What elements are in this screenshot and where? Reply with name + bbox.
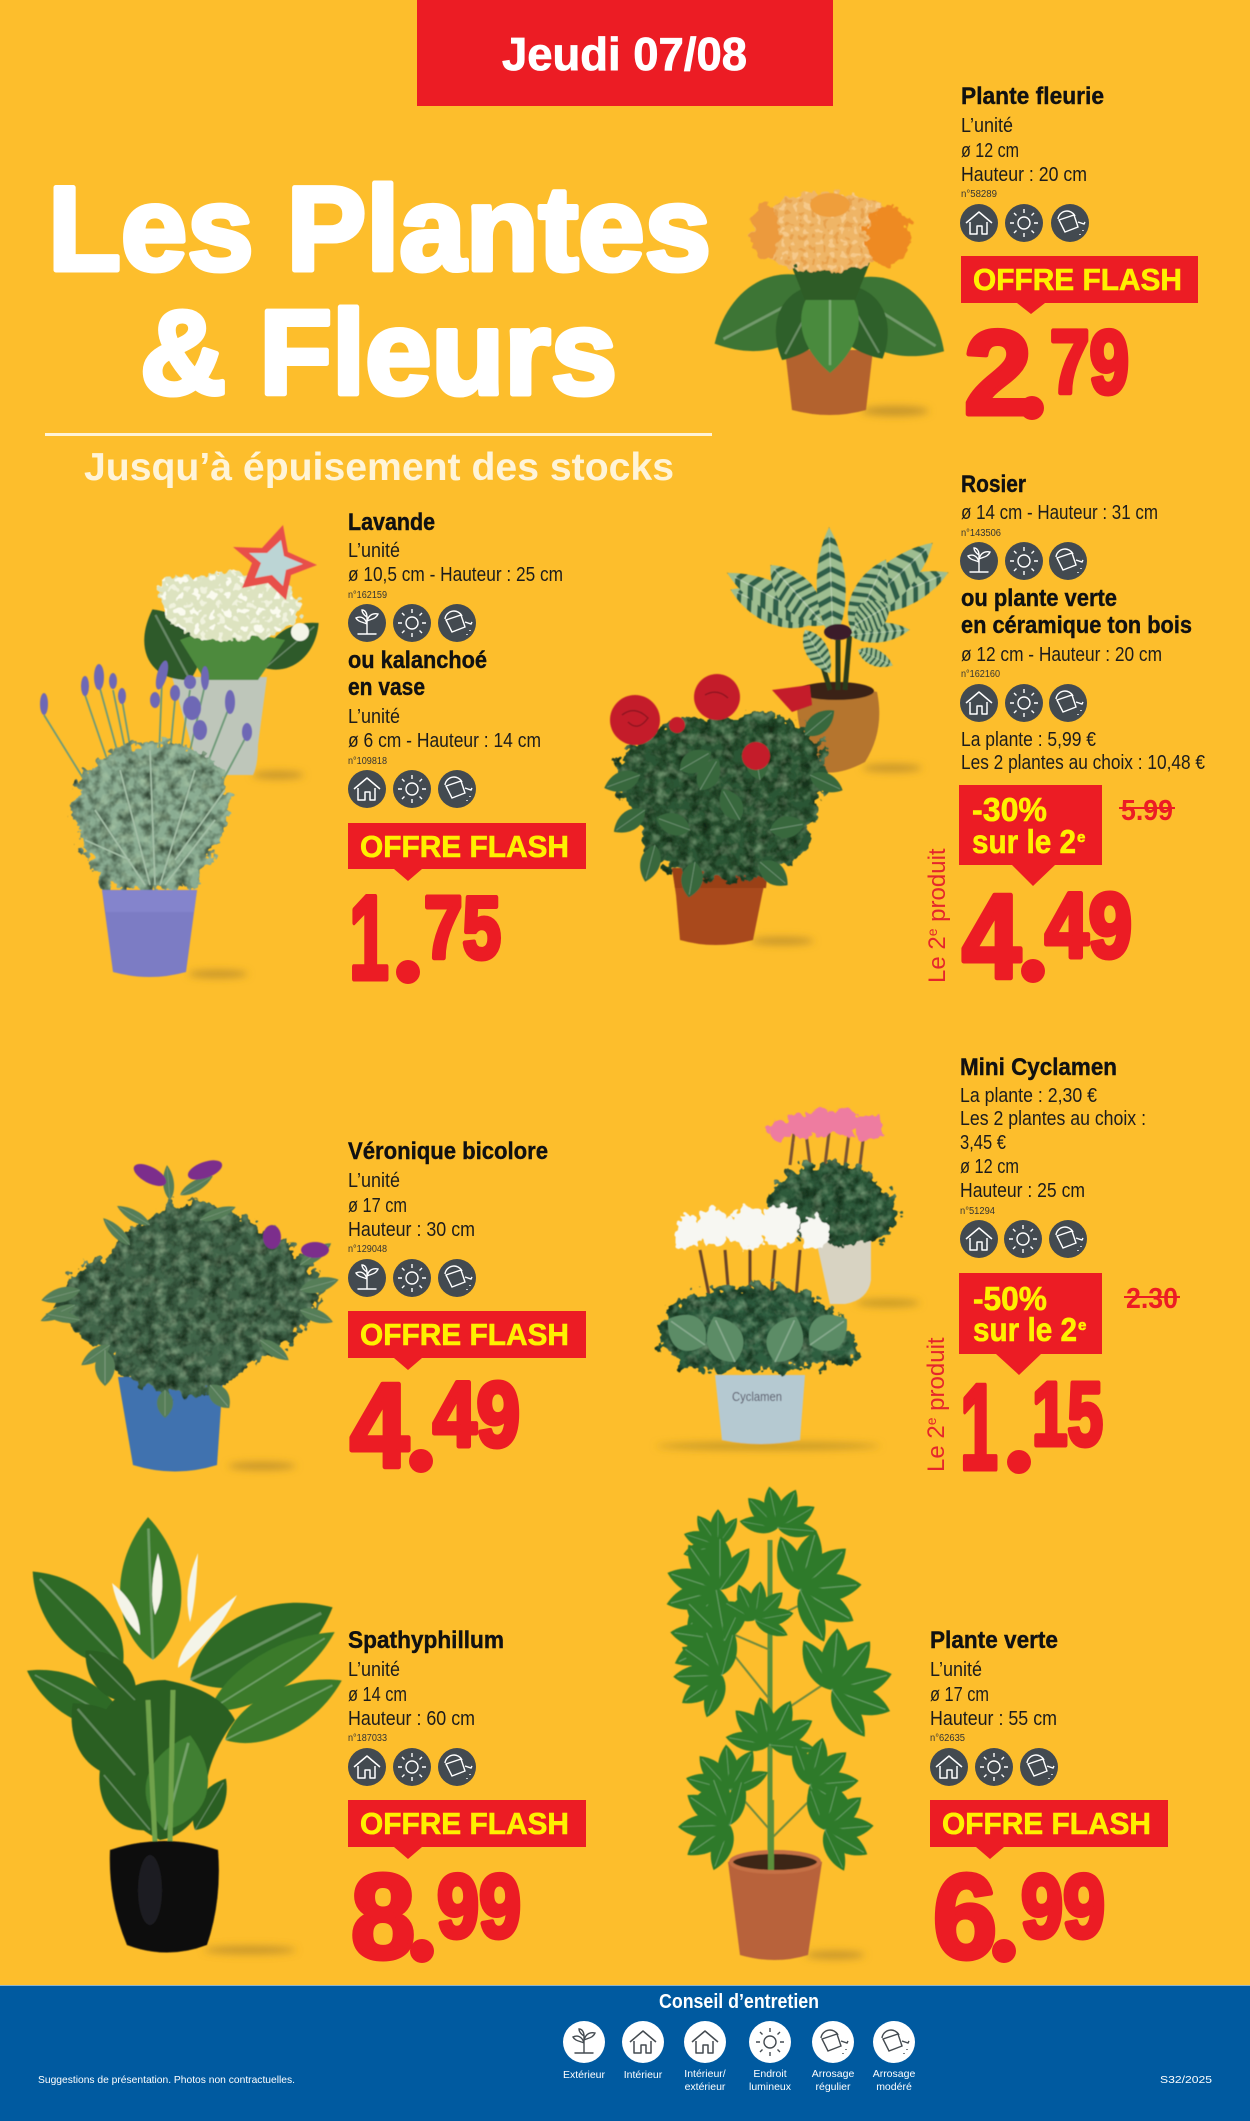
date banner: Jeudi 07/08 xyxy=(502,28,747,80)
care legend: endroit lumineux: Endroit xyxy=(753,2068,787,2080)
care legend: exterieur xyxy=(563,2021,606,2081)
care legend: endroit lumineux: lumineux xyxy=(749,2081,792,2093)
alternative name xyxy=(961,585,1192,639)
alternative name: ou plante verte xyxy=(961,585,1117,612)
offre flash badge: OFFRE FLASH xyxy=(973,262,1182,297)
price: 1 xyxy=(349,871,389,1005)
vertical note: produit xyxy=(924,848,951,928)
care icons xyxy=(348,604,476,642)
product details: ø 17 cm xyxy=(930,1684,989,1706)
offre flash badge: OFFRE FLASH xyxy=(942,1806,1151,1841)
product details xyxy=(348,1170,475,1255)
care legend: exterieur: Extérieur xyxy=(563,2069,606,2081)
care icons xyxy=(930,1748,1058,1786)
product details: ø 14 cm xyxy=(348,1684,407,1706)
care icons xyxy=(348,1259,476,1297)
panel: spathyphillum xyxy=(348,1627,586,1984)
price: 15 xyxy=(1032,1365,1103,1465)
product details: La plante : 2,30 € xyxy=(960,1085,1097,1107)
discount badge xyxy=(959,785,1102,886)
price xyxy=(351,1850,521,1984)
panel: veronique bicolore xyxy=(348,1138,586,1493)
product details: n°62635 xyxy=(930,1733,965,1744)
product details xyxy=(348,540,563,601)
care legend: arrosage regulier: Arrosage xyxy=(812,2068,854,2080)
discount badge: e xyxy=(1077,829,1085,846)
product name: Spathyphillum xyxy=(348,1627,504,1654)
product details xyxy=(930,1659,1057,1744)
care icons xyxy=(960,1220,1087,1258)
price: 4 xyxy=(962,870,1021,1004)
care icons xyxy=(960,204,1089,242)
plant: orange kalanchoe xyxy=(699,192,962,416)
vertical note: e xyxy=(923,1417,939,1425)
plant: white kalanchoe with star xyxy=(129,525,330,779)
discount badge xyxy=(959,1273,1102,1375)
footer band xyxy=(0,1985,1250,2121)
alternative details: ø 12 cm - Hauteur : 20 cm xyxy=(961,644,1162,666)
price: 49 xyxy=(1045,875,1132,977)
care legend: arrosage modere: modéré xyxy=(876,2081,912,2093)
care legend: interieur exterieur: Intérieur/ xyxy=(684,2068,726,2080)
discount badge: -50% xyxy=(973,1280,1047,1317)
product details: ø 12 cm xyxy=(960,1156,1019,1178)
product details: ø 14 cm - Hauteur : 31 cm xyxy=(961,502,1158,524)
product details: Les 2 plantes au choix : xyxy=(960,1108,1146,1130)
price xyxy=(962,870,1132,1004)
care legend: arrosage regulier: régulier xyxy=(815,2081,851,2093)
offre flash badge: OFFRE FLASH xyxy=(360,829,569,864)
alternative name: en vase xyxy=(348,674,425,701)
vertical note: produit xyxy=(923,1337,950,1417)
panel: rosier xyxy=(924,471,1205,1004)
care icons xyxy=(348,770,476,808)
vertical note: Le 2 xyxy=(924,936,951,983)
care icons xyxy=(348,1748,476,1786)
product details: n°51294 xyxy=(960,1206,995,1217)
product details: Hauteur : 20 cm xyxy=(961,164,1087,186)
title: & Fleurs xyxy=(140,286,617,420)
offre flash badge: OFFRE FLASH xyxy=(360,1317,569,1352)
product details: n°129048 xyxy=(348,1244,387,1255)
subtitle: Jusqu’à épuisement des stocks xyxy=(84,446,674,489)
care legend: interieur exterieur xyxy=(684,2021,726,2093)
care legend: endroit lumineux xyxy=(749,2021,792,2093)
old price: 5.99 xyxy=(1121,795,1173,827)
care icons xyxy=(960,684,1087,722)
price: 4 xyxy=(350,1359,409,1493)
star pick xyxy=(233,525,317,600)
panel: plante verte xyxy=(930,1627,1168,1984)
price xyxy=(960,1359,1103,1495)
price: 6 xyxy=(933,1850,997,1984)
price: 99 xyxy=(1021,1857,1105,1957)
date banner xyxy=(417,0,833,106)
price xyxy=(350,1359,520,1493)
product details: L’unité xyxy=(930,1659,982,1681)
product details: Hauteur : 25 cm xyxy=(960,1180,1085,1202)
care legend: interieur xyxy=(622,2021,664,2081)
price: 2 xyxy=(964,306,1032,440)
plant: rose xyxy=(601,674,846,945)
product details: n°187033 xyxy=(348,1733,387,1744)
footer heading: Conseil d’entretien xyxy=(659,1991,819,2013)
offre flash badge xyxy=(348,1311,586,1370)
unit prices xyxy=(961,729,1205,774)
product details xyxy=(961,502,1158,539)
product details: L’unité xyxy=(961,115,1013,137)
care legend: arrosage modere xyxy=(873,2021,915,2093)
price: 79 xyxy=(1050,313,1129,413)
product name: Plante verte xyxy=(930,1627,1058,1654)
offre flash badge xyxy=(348,823,586,881)
care legend: arrosage regulier xyxy=(812,2021,854,2093)
panel: plante fleurie xyxy=(960,83,1198,440)
discount badge: -30% xyxy=(972,791,1047,828)
product details: n°162159 xyxy=(348,590,387,601)
product name: Lavande xyxy=(348,509,435,536)
vertical note: Le 2 xyxy=(923,1425,950,1472)
plant: veronique xyxy=(38,1156,341,1472)
price: 99 xyxy=(437,1857,521,1957)
product details xyxy=(348,1659,475,1744)
price: 75 xyxy=(424,878,501,977)
price: 8 xyxy=(351,1850,415,1984)
product details xyxy=(960,1085,1146,1217)
plant: cyclamen: Cyclamen xyxy=(732,1389,782,1404)
plant: cyclamen xyxy=(656,1108,920,1450)
week code: S32/2025 xyxy=(1160,2074,1212,2086)
product details: L’unité xyxy=(348,1170,400,1192)
old price: 2.30 xyxy=(1126,1283,1178,1315)
alternative details xyxy=(348,706,541,767)
alternative details: ø 6 cm - Hauteur : 14 cm xyxy=(348,730,541,752)
product details: n°58289 xyxy=(961,189,997,200)
discount badge: sur le 2 xyxy=(972,823,1076,860)
product name: Plante fleurie xyxy=(961,83,1104,110)
product details: ø 17 cm xyxy=(348,1195,407,1217)
plant: spathiphyllum xyxy=(13,1516,352,1954)
product details: ø 12 cm xyxy=(961,140,1019,162)
product details: L’unité xyxy=(348,540,400,562)
plant: lavender xyxy=(40,659,252,978)
offre flash badge xyxy=(348,1800,586,1859)
offre flash badge xyxy=(961,256,1198,314)
care legend: interieur exterieur: extérieur xyxy=(685,2081,726,2093)
title rule xyxy=(45,433,712,436)
panel: lavande xyxy=(348,509,586,1005)
alternative details xyxy=(961,644,1162,680)
product details: Hauteur : 60 cm xyxy=(348,1708,475,1730)
discount badge: e xyxy=(1078,1317,1086,1334)
alternative name xyxy=(348,647,487,701)
footer disclaimer: Suggestions de présentation. Photos non contractuelles. xyxy=(38,2074,295,2086)
product details: n°143506 xyxy=(961,528,1001,539)
alternative details: L’unité xyxy=(348,706,400,728)
product name: Véronique bicolore xyxy=(348,1138,548,1165)
product details xyxy=(961,115,1087,200)
plant: schefflera xyxy=(645,1485,919,1960)
price: 49 xyxy=(433,1364,520,1466)
offre flash badge xyxy=(930,1800,1168,1859)
panel: mini cyclamen xyxy=(923,1054,1180,1495)
title: Les Plantes xyxy=(48,162,711,296)
product name: Mini Cyclamen xyxy=(960,1054,1117,1081)
product details: ø 10,5 cm - Hauteur : 25 cm xyxy=(348,564,563,586)
offre flash badge: OFFRE FLASH xyxy=(360,1806,569,1841)
price xyxy=(349,871,501,1005)
plant: calathea xyxy=(720,527,954,773)
product name: Rosier xyxy=(961,471,1026,498)
alternative name: en céramique ton bois xyxy=(961,612,1192,639)
price xyxy=(933,1850,1105,1984)
unit prices: Les 2 plantes au choix : 10,48 € xyxy=(961,752,1205,774)
alternative name: ou kalanchoé xyxy=(348,647,487,674)
title xyxy=(48,162,711,420)
product details: Hauteur : 55 cm xyxy=(930,1708,1057,1730)
product details: 3,45 € xyxy=(960,1132,1006,1154)
product details: Hauteur : 30 cm xyxy=(348,1219,475,1241)
unit prices: La plante : 5,99 € xyxy=(961,729,1096,751)
alternative details: n°109818 xyxy=(348,756,387,767)
discount badge: sur le 2 xyxy=(973,1311,1077,1348)
alternative details: n°162160 xyxy=(961,669,1000,680)
care legend: interieur: Intérieur xyxy=(624,2069,663,2081)
care icons xyxy=(960,542,1087,580)
care legend: arrosage modere: Arrosage xyxy=(873,2068,915,2080)
vertical note: e xyxy=(924,928,940,936)
product details: L’unité xyxy=(348,1659,400,1681)
price xyxy=(964,306,1129,440)
price: 1 xyxy=(960,1359,998,1495)
